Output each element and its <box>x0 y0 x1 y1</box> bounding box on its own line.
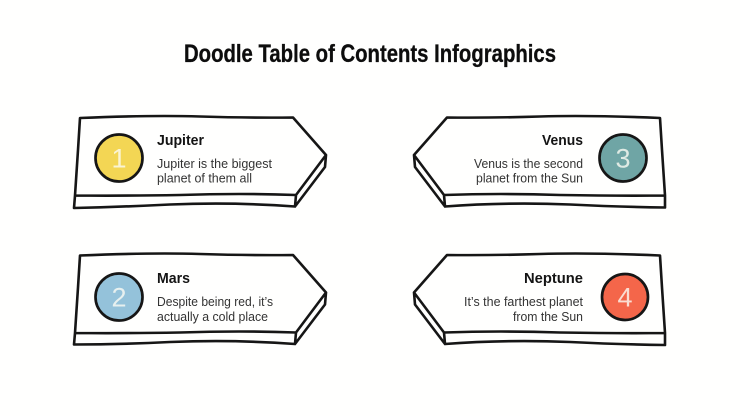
text: Neptune description: from the Sun <box>513 310 583 324</box>
text: Mars description: Despite being red, it’s <box>157 295 273 309</box>
icon: number 1 circle: 1 <box>111 144 127 174</box>
panel: Venus <box>414 116 665 208</box>
arrow tag outline: Jupiter <box>74 116 326 208</box>
text: Venus description: Venus is the second <box>474 157 583 171</box>
heading: Jupiter: Jupiter <box>157 132 204 149</box>
panel: Neptune <box>414 254 665 345</box>
icon: number 3 circle: 3 <box>615 144 631 174</box>
text: Mars description: actually a cold place <box>157 310 268 324</box>
icon: number 2 circle: 2 <box>111 282 127 312</box>
text: Neptune description: It’s the farthest planet <box>464 295 584 309</box>
title: Doodle Table of Contents Infographics <box>184 40 556 68</box>
heading: Venus: Venus <box>542 132 583 149</box>
icon: number 3 circle <box>600 134 646 182</box>
text: Jupiter description: planet of them all <box>157 172 252 186</box>
icon: number 4 circle <box>602 274 648 320</box>
text: Venus description: planet from the Sun <box>476 172 583 186</box>
heading: Neptune: Neptune <box>524 270 583 287</box>
arrow tag outline: Neptune <box>414 254 665 345</box>
arrow tag outline: Venus <box>414 116 665 208</box>
arrow tag outline: Mars <box>74 254 326 344</box>
panel: Mars <box>74 254 326 344</box>
text: Jupiter description: Jupiter is the biggest <box>157 157 273 171</box>
icon: number 4 circle: 4 <box>617 282 633 312</box>
panel: Jupiter <box>74 116 326 208</box>
heading: Mars: Mars <box>157 270 190 287</box>
icon: number 2 circle <box>96 274 142 320</box>
icon: number 1 circle <box>96 134 142 182</box>
